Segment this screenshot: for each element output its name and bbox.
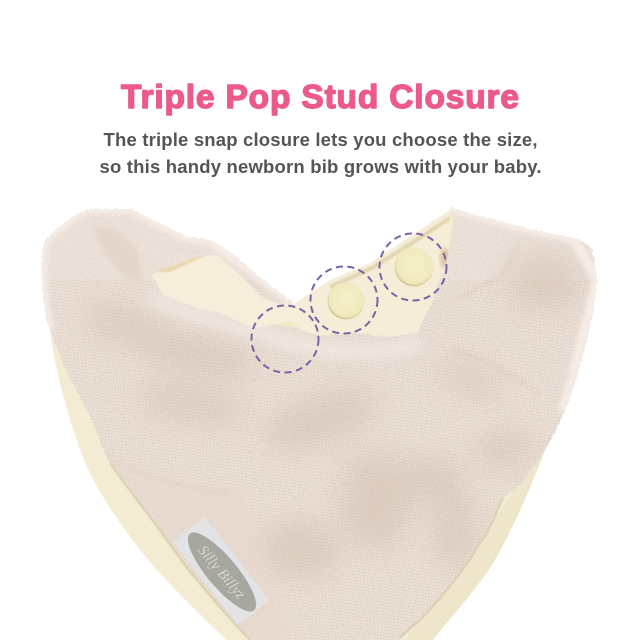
bib illustration	[40, 208, 600, 640]
lump fold shadow	[103, 453, 230, 493]
right lobe crease	[450, 245, 517, 302]
edge highlight	[42, 208, 597, 412]
inner neck lining left	[152, 255, 320, 332]
brand label	[173, 517, 269, 625]
snap stud: middle stud	[328, 282, 364, 320]
description text	[100, 129, 542, 177]
stitched neck edge	[330, 218, 450, 287]
weave texture	[40, 280, 600, 640]
label brand name: Silly Billyz	[194, 543, 248, 603]
terry tonal patches	[40, 208, 600, 640]
fold crease	[450, 350, 540, 395]
snap stud: upper stud	[394, 248, 434, 286]
snap stud: partly hidden lower stud	[277, 321, 300, 327]
bib cream backing trim	[50, 330, 545, 640]
infographic canvas	[40, 83, 598, 640]
description text: The triple snap closure lets you choose the size,	[104, 129, 538, 150]
lower bib pinker area	[144, 489, 274, 629]
label tag	[173, 517, 269, 625]
trim shading	[405, 450, 545, 640]
inner neck lining right	[294, 209, 470, 345]
seam stitching	[110, 463, 503, 640]
brown shade by upper snap	[440, 248, 450, 268]
label oval	[178, 524, 266, 620]
main top fold highlight	[150, 298, 420, 351]
title: Triple Pop Stud Closure	[121, 79, 519, 116]
collar pocket shade	[93, 227, 143, 282]
terry towelling body	[42, 208, 597, 640]
dashed highlight circles	[252, 234, 446, 372]
lining fold shade	[155, 256, 205, 272]
description text: so this handy newborn bib grows with your baby.	[100, 156, 542, 177]
